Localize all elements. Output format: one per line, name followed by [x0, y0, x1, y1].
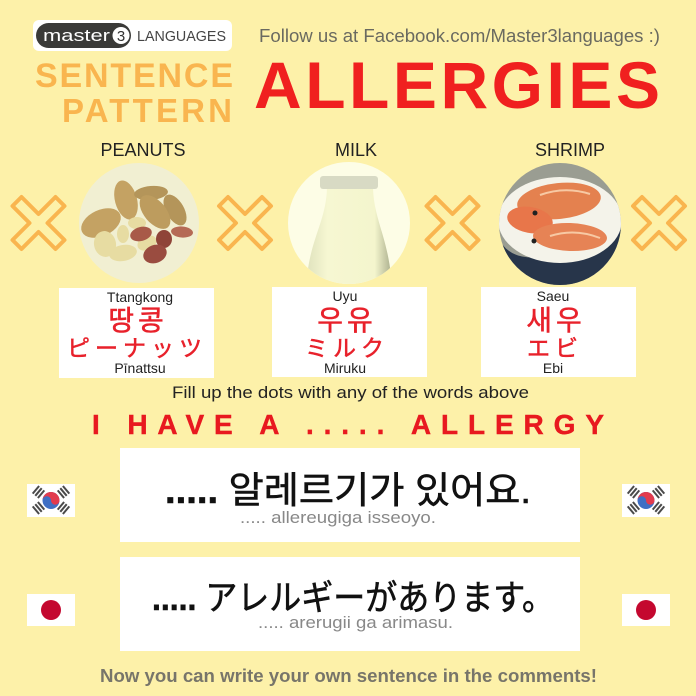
- food labels: SHRIMP: [535, 140, 605, 160]
- shrimp word card: [481, 287, 636, 377]
- peanuts image: [76, 163, 199, 283]
- sentence pattern heading: PATTERN: [62, 92, 232, 129]
- korean flag right: [622, 484, 670, 517]
- peanuts word card: Pīnattsu: [114, 360, 166, 376]
- logo: 3: [117, 28, 125, 45]
- logo: master: [43, 26, 110, 45]
- logo: LANGUAGES: [137, 28, 226, 45]
- sentence pattern heading: [35, 57, 233, 129]
- food labels: MILK: [335, 140, 377, 160]
- peanuts word card: 땅콩: [108, 305, 168, 336]
- closing line: Now you can write your own sentence in the comments!: [100, 666, 597, 686]
- milk word card: Uyu: [333, 288, 357, 304]
- pattern sentence: I HAVE A ..... ALLERGY: [92, 409, 604, 440]
- japanese flag right: [622, 594, 670, 626]
- shrimp image: [495, 163, 625, 290]
- milk image: [288, 162, 410, 290]
- korean sentence panel: ..... allereugiga isseoyo.: [240, 508, 436, 527]
- food labels: PEANUTS: [100, 140, 186, 160]
- shrimp word card: 새우: [526, 305, 586, 336]
- logo: [33, 20, 232, 51]
- title: ALLERGIES: [254, 48, 660, 122]
- milk word card: Miruku: [324, 360, 366, 376]
- milk word card: ミルク: [305, 335, 389, 361]
- japanese sentence panel: [120, 557, 580, 651]
- sentence pattern heading: SENTENCE: [35, 57, 233, 95]
- milk word card: 우유: [317, 305, 377, 336]
- milk word card: [272, 287, 427, 377]
- korean sentence panel: ..... 알레르기가 있어요.: [165, 470, 531, 511]
- peanuts word card: Ttangkong: [107, 289, 173, 305]
- cross icons: [12, 197, 685, 249]
- peanuts word card: [59, 288, 214, 378]
- shrimp word card: Ebi: [543, 360, 563, 376]
- japanese sentence panel: ..... アレルギーがあります。: [152, 579, 554, 618]
- follow text: Follow us at Facebook.com/Master3languages :): [259, 26, 660, 46]
- food labels: [100, 140, 605, 160]
- japanese sentence panel: ..... arerugii ga arimasu.: [258, 613, 453, 632]
- japanese flag left: [27, 594, 75, 626]
- peanuts word card: ピーナッツ: [67, 335, 207, 361]
- shrimp word card: エビ: [527, 335, 583, 361]
- korean flag left: [27, 484, 75, 517]
- korean sentence panel: [120, 448, 580, 542]
- instruction text: Fill up the dots with any of the words above: [172, 383, 529, 402]
- shrimp word card: Saeu: [537, 288, 569, 304]
